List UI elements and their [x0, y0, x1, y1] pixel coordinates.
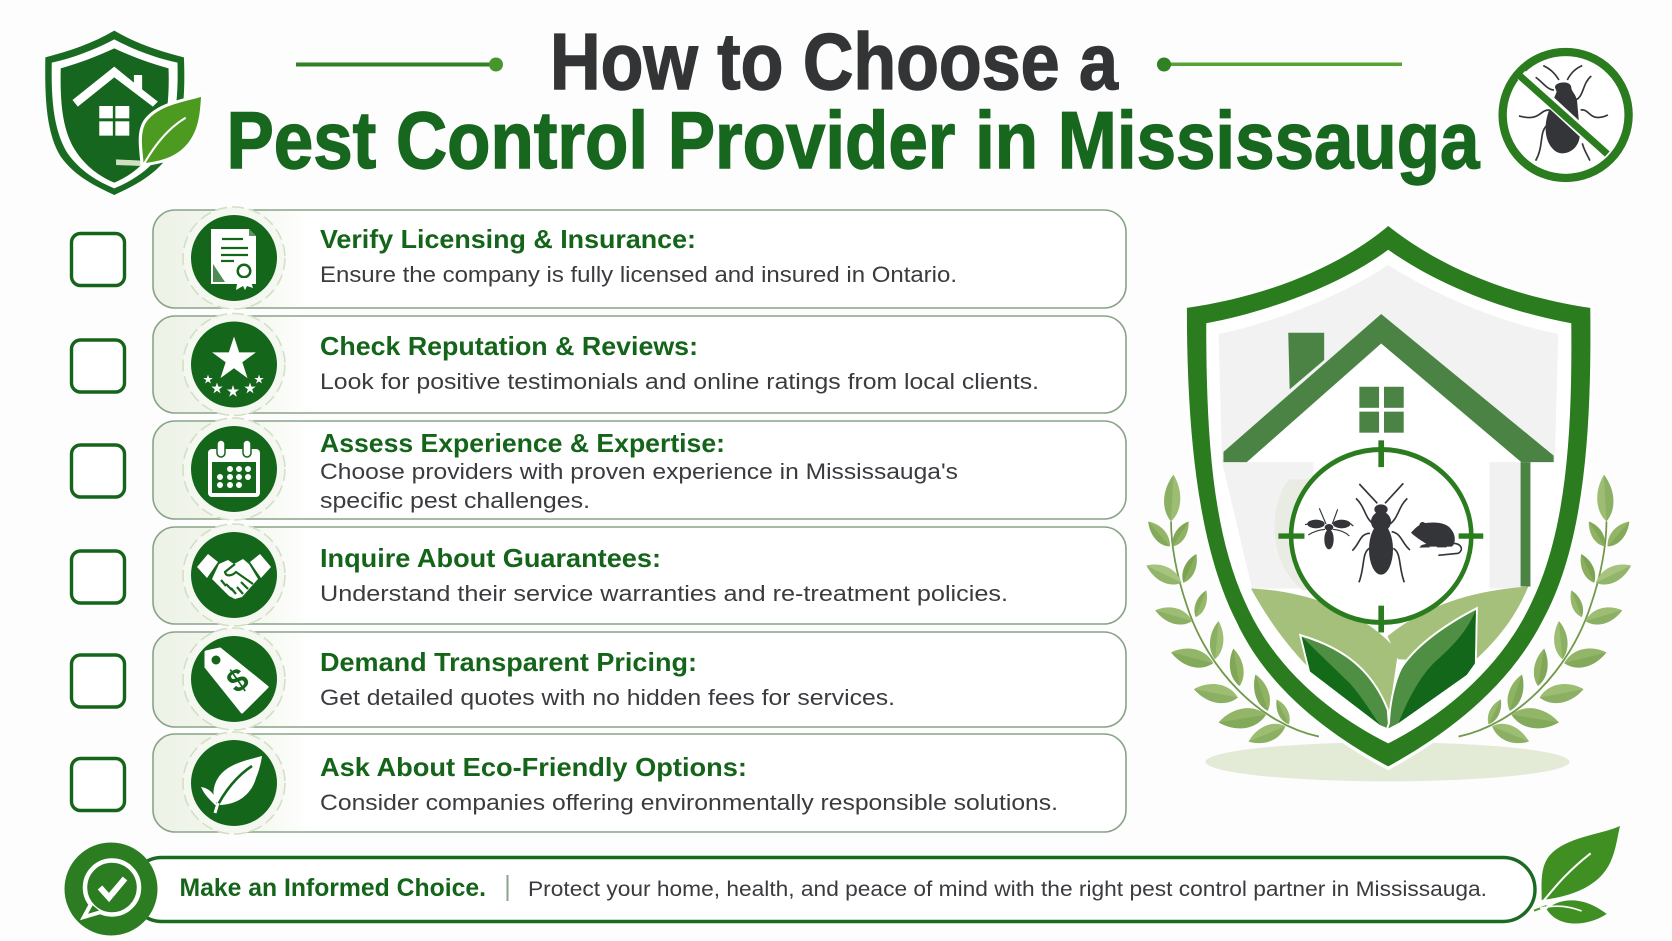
icon: certificate document — [183, 207, 285, 309]
shield outer — [1187, 226, 1590, 766]
icon: no bugs — [1503, 52, 1629, 178]
panel: verify licensing — [153, 207, 1126, 309]
ant — [1305, 508, 1353, 549]
panel: check reputation — [153, 314, 1126, 416]
description: Understand their service warranties and re-treatment policies. — [320, 581, 1008, 606]
callout text: Protect your home, health, and peace of mind with the right pest control partner in Mississauga. — [528, 877, 1487, 901]
panel: eco-friendly options — [153, 732, 1126, 834]
heading: Check Reputation & Reviews: — [320, 331, 698, 361]
house window — [1359, 387, 1404, 433]
description line two: specific pest challenges. — [320, 488, 590, 513]
heading: Demand Transparent Pricing: — [320, 647, 697, 677]
description: Ensure the company is fully licensed and insured in Ontario. — [320, 262, 957, 287]
checklist checkboxes — [72, 234, 124, 810]
icon: price tag: $ — [220, 660, 255, 700]
heading: Verify Licensing & Insurance: — [320, 224, 696, 254]
decorative title line left — [296, 58, 503, 72]
right leaf — [1388, 610, 1476, 729]
icon: handshake — [183, 524, 285, 626]
title: How to Choose a — [550, 17, 1118, 106]
title — [226, 17, 1480, 186]
target reticle — [1278, 440, 1483, 632]
left leaf — [1302, 637, 1388, 729]
pests in reticle — [1305, 483, 1461, 582]
hills — [1251, 588, 1398, 724]
callout bar — [64, 842, 1535, 936]
heading: Assess Experience & Expertise: — [320, 428, 725, 458]
icon: star rating — [183, 314, 285, 416]
description: Get detailed quotes with no hidden fees for services. — [320, 685, 895, 710]
shield grey backdrop — [1219, 265, 1558, 588]
house chimney — [1288, 333, 1324, 389]
icon: chat check — [64, 842, 158, 936]
leaves — [1302, 610, 1476, 729]
laurel right — [1459, 474, 1634, 749]
icon: calendar — [183, 418, 285, 520]
house roof — [1223, 314, 1554, 462]
panel: assess experience — [153, 418, 1126, 520]
panel: inquire about guarantees — [153, 524, 1126, 626]
house wall — [1247, 344, 1521, 588]
icon: leaf — [183, 732, 285, 834]
title: Pest Control Provider in Mississauga — [226, 96, 1480, 186]
callout heading: Make an Informed Choice. — [180, 874, 486, 902]
decorative title line right — [1157, 58, 1402, 72]
ground shadow — [1206, 742, 1570, 781]
description: Consider companies offering environmentally responsible solutions. — [320, 790, 1058, 815]
mouse — [1411, 522, 1461, 555]
logo: shield with house and leaf — [45, 31, 203, 195]
description: Choose providers with proven experience in Mississauga's — [320, 459, 958, 484]
house side wall — [1521, 462, 1530, 587]
icon: price tag — [183, 628, 285, 730]
icon: corner leaves — [1534, 826, 1620, 924]
cockroach — [1352, 483, 1410, 582]
illustration: shield with house and pests — [1143, 226, 1634, 781]
heading: Ask About Eco-Friendly Options: — [320, 752, 747, 782]
heading: Inquire About Guarantees: — [320, 543, 661, 573]
panel: demand transparent pricing — [153, 628, 1126, 730]
laurel left — [1143, 474, 1319, 749]
shield inner — [1206, 250, 1571, 743]
description: Look for positive testimonials and online ratings from local clients. — [320, 369, 1039, 394]
